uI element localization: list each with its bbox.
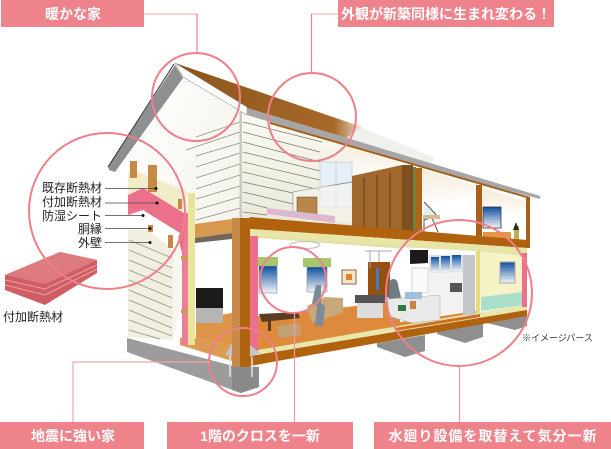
label: first floor wallpaper: 1階のクロスを一新 <box>200 428 320 444</box>
label: warm house <box>1 0 144 27</box>
highlight circles <box>29 53 532 396</box>
roof <box>108 63 540 199</box>
layer label: moisture barrier sheet: 防湿シート <box>42 208 102 223</box>
layer label: furring strip: 胴縁 <box>78 221 102 236</box>
structural frame <box>180 193 527 367</box>
connector lines <box>73 14 460 422</box>
image note: ※イメージパース <box>522 333 593 343</box>
label: exterior reborn as new <box>338 0 554 27</box>
insulation board stack <box>5 252 97 305</box>
layer label: added insulation: 付加断熱材 <box>42 195 102 209</box>
layer label: existing insulation: 既存断熱材 <box>42 181 102 195</box>
layer label: outer wall: 外壁 <box>78 236 102 250</box>
label: exterior reborn as new: 外観が新築同様に生まれ変わる！ <box>341 6 551 22</box>
upper floor interior <box>267 146 540 248</box>
first floor room <box>196 221 527 350</box>
wall insulation cutaway <box>128 161 188 253</box>
label: water facilities: 水廻り設備を取替えて気分一新 <box>388 428 598 444</box>
foundation <box>127 313 527 393</box>
anchor brackets and bolts <box>225 343 260 377</box>
label: earthquake resistant: 地震に強い家 <box>31 428 115 444</box>
label: first floor wallpaper <box>167 422 353 449</box>
kitchen and bath <box>388 247 527 331</box>
living room furniture <box>258 242 392 338</box>
insulation board caption: 付加断熱材 <box>3 310 63 324</box>
label: warm house: 暖かな家 <box>45 6 101 22</box>
label: water facilities <box>374 422 611 449</box>
house cross-section illustration <box>108 63 540 393</box>
annotation callouts for wall layers <box>42 181 158 250</box>
gable wall with siding <box>128 78 240 340</box>
long wall with siding <box>240 112 352 227</box>
label: earthquake resistant <box>0 422 144 449</box>
